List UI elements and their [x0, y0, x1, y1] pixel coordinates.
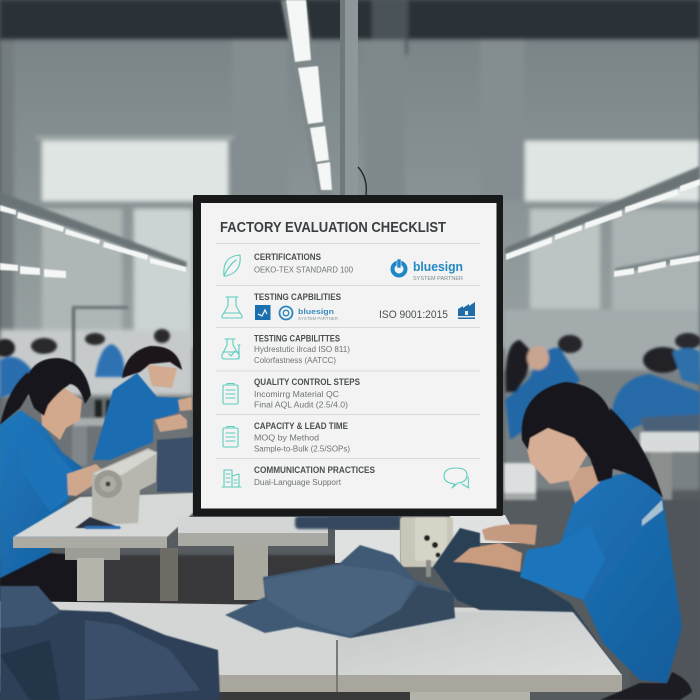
heading: testing capabilities variant: TESTING CAPBILITTES [254, 334, 340, 344]
left sewing machine [75, 448, 157, 529]
row: communication [222, 465, 469, 488]
icon: factory building [222, 470, 241, 487]
row: testing capabilities 1 [222, 292, 475, 321]
left seated worker [0, 346, 400, 602]
text: incoming qc: Incomirrg Material QC [254, 389, 339, 399]
row: capacity and lead time [223, 421, 350, 454]
icon: clipboard [223, 426, 238, 447]
text: oeko-tex: OEKO-TEX STANDARD 100 [254, 264, 353, 274]
logo: bluesign small: bluesign [298, 307, 334, 316]
icon: flask [222, 297, 242, 318]
text: dual-language: Dual-Language Support [254, 477, 342, 487]
dark garment on foreground table [0, 528, 603, 700]
row dividers [216, 244, 480, 458]
logo: bluesign: bluesign [413, 260, 463, 274]
board frame [193, 195, 503, 516]
icon: flask with tube [222, 339, 240, 359]
floor and lower area [0, 500, 700, 700]
row: testing capabilities 2 [222, 334, 350, 365]
logo: bluesign [392, 259, 463, 282]
text: iso 9001: ISO 9001:2015 [379, 309, 448, 321]
heading: communication: COMMUNICATION PRACTICES [254, 465, 375, 475]
logo: bluesign small [280, 306, 338, 321]
logo: bluesign: SYSTEM PARTNER [413, 276, 463, 282]
heading: quality control steps: QUALITY CONTROL STEPS [254, 377, 360, 387]
title: FACTORY EVALUATION CHECKLIST [220, 220, 446, 236]
board surface [201, 203, 496, 508]
panel: checklist board [193, 195, 503, 516]
worker 2 back left [93, 346, 193, 492]
icon: chat bubbles [444, 468, 469, 488]
foreground table [0, 601, 622, 700]
foreground sewing machine [400, 517, 453, 577]
right foreground worker [453, 382, 692, 700]
mid tables right [335, 515, 520, 563]
logo: iso building [458, 302, 475, 319]
heading: testing capabilities: TESTING CAPBILITIES [254, 292, 341, 302]
text: sample to bulk: Sample-to-Bulk (2.5/SOPs) [254, 444, 350, 454]
text: final aql: Final AQL Audit (2.5/4.0) [254, 400, 348, 410]
text: hydrostatic: Hydrestutic ilrcad ISO 811) [254, 344, 350, 354]
background workers and tables [0, 306, 700, 502]
icon: clipboard [223, 384, 238, 404]
heading: capacity: CAPACITY & LEAD TIME [254, 421, 348, 431]
text: colorfastness: Colorfastness (AATCC) [254, 355, 336, 365]
text: moq: MOQ by Method [254, 432, 319, 442]
row: certifications [224, 252, 463, 282]
row: quality control [223, 377, 360, 410]
logo: bluesign small: SYSTEM PARTNER [298, 316, 338, 321]
left sewing table [13, 493, 400, 601]
support column [340, 0, 358, 196]
heading: certifications: CERTIFICATIONS [254, 252, 321, 262]
icon: leaf [224, 255, 240, 276]
logo: blue square mark [255, 305, 270, 320]
ceiling lights [0, 0, 700, 278]
